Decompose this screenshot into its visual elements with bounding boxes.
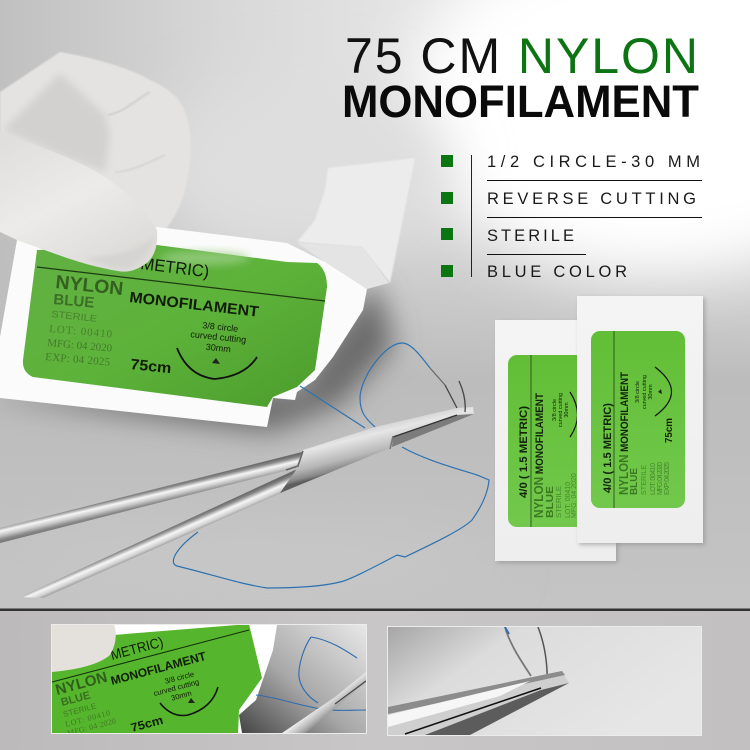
- label text: STERILE: [641, 465, 648, 495]
- needle triangle: [212, 358, 220, 364]
- needle arc: [655, 367, 672, 416]
- needle and thread: [505, 627, 531, 676]
- paper: [495, 320, 616, 561]
- label text: curved cutting: [153, 677, 200, 698]
- label text: BLUE: [545, 486, 556, 518]
- upper shaft: [0, 452, 302, 543]
- label text: 3/8 circle: [635, 381, 641, 403]
- small package back: [495, 320, 618, 563]
- curved needle: [445, 381, 465, 412]
- feature labels: STERILE: [487, 227, 574, 245]
- divider: [530, 355, 532, 527]
- feature labels: REVERSE CUTTING: [487, 190, 696, 208]
- jaw body: [280, 407, 474, 493]
- label text: 3/8 circle: [552, 399, 558, 421]
- forceps: [282, 672, 366, 733]
- package paper: [0, 227, 367, 427]
- label text: STERILE: [62, 701, 97, 719]
- feature labels: 1/2 CIRCLE-30 MM: [487, 153, 700, 171]
- glove: front finger: [0, 132, 157, 272]
- green label: [508, 355, 588, 527]
- label text: BLUE: [629, 468, 640, 495]
- label text: EXP: 04 2025: [664, 462, 671, 495]
- label text: NYLON: [54, 272, 124, 300]
- label text: LOT: 00410: [49, 323, 113, 341]
- label text: LOT: 00410: [650, 463, 657, 495]
- thumbnail: package close-up: [51, 624, 367, 738]
- label text: MFG: 04 2020: [47, 337, 113, 355]
- label text: NYLON MONOFILAMENT: [616, 372, 631, 495]
- label text: 3/8 circle: [202, 320, 239, 334]
- label text: LOT: 00410: [565, 482, 572, 518]
- label text: 75cm: [129, 713, 165, 735]
- small package front: [577, 296, 705, 545]
- label text: 75cm: [130, 356, 172, 377]
- needle arc: [570, 392, 578, 437]
- label text: 30mm: [648, 384, 654, 400]
- jaw lower blade: [392, 414, 474, 447]
- label divider: [37, 267, 325, 301]
- label text: MFG: 04 2020: [571, 473, 578, 518]
- label text: METRIC): [140, 254, 210, 281]
- forceps jaw: [388, 671, 569, 735]
- gray backdrop: [239, 625, 366, 733]
- suture: [256, 637, 366, 710]
- peeled foil flap: [297, 158, 415, 289]
- label text: EXP: 04 2025: [45, 351, 111, 369]
- feature labels: BLUE COLOR: [487, 263, 627, 281]
- title line two: MONOFILAMENT: [342, 76, 699, 127]
- label text: curved cutting: [558, 393, 564, 427]
- label divider: [52, 630, 249, 682]
- label text: MFG: 04 2020: [66, 716, 117, 738]
- title line one: 75 CM NYLON: [345, 28, 698, 84]
- label text: curved cutting: [642, 375, 648, 409]
- label text: 75cm: [664, 418, 675, 443]
- label text: MONOFILAMENT: [109, 649, 208, 688]
- label text: METRIC): [109, 633, 165, 663]
- label text: [518, 393, 578, 518]
- lower shaft: [20, 467, 340, 598]
- glove tip: [52, 624, 116, 672]
- label text: [602, 372, 675, 495]
- label text: 30mm: [205, 342, 231, 354]
- thumbnail: needle holder close-up: [387, 626, 702, 736]
- label text: 4/0 ( 1.5 METRIC): [518, 406, 530, 498]
- green bullets: [441, 155, 453, 277]
- green label: [591, 331, 685, 508]
- jaw slot: [393, 415, 457, 437]
- label text: 3/8 circle: [164, 669, 195, 686]
- glove: back fingers: [0, 52, 191, 232]
- label text: [45, 254, 260, 377]
- needle arc: [177, 348, 257, 379]
- needle arc: [160, 687, 218, 716]
- label text: 30mm: [564, 402, 570, 418]
- label text: curved cutting: [190, 329, 247, 345]
- needle triangle: [658, 389, 662, 394]
- label text: MFG: 04 2020: [657, 462, 664, 495]
- blue suture thread: [173, 343, 489, 588]
- bottom band: [0, 608, 750, 750]
- green label: [23, 245, 327, 407]
- feature list: [441, 153, 702, 281]
- label text: STERILE: [51, 309, 98, 325]
- divider: [613, 331, 615, 508]
- needle triangle: [188, 698, 195, 703]
- green label: [52, 624, 262, 734]
- label text: NYLON MONOFILAMENT: [531, 393, 546, 518]
- label text: BLUE: [60, 690, 92, 709]
- label text: [55, 637, 205, 733]
- label text: NYLON: [54, 669, 109, 699]
- label text: LOT: 00410: [64, 708, 111, 729]
- label text: BLUE: [53, 291, 95, 312]
- label text: 30mm: [170, 689, 193, 703]
- paper: [577, 296, 703, 543]
- feature labels: [487, 153, 700, 281]
- main suture package: [0, 227, 367, 427]
- label text: STERILE: [556, 486, 563, 518]
- label text: 4/0 ( 1.5 METRIC): [602, 403, 614, 493]
- joint: [286, 451, 303, 470]
- title: [342, 28, 699, 127]
- label text: MONOFILAMENT: [129, 289, 260, 321]
- needle holder: [0, 381, 474, 598]
